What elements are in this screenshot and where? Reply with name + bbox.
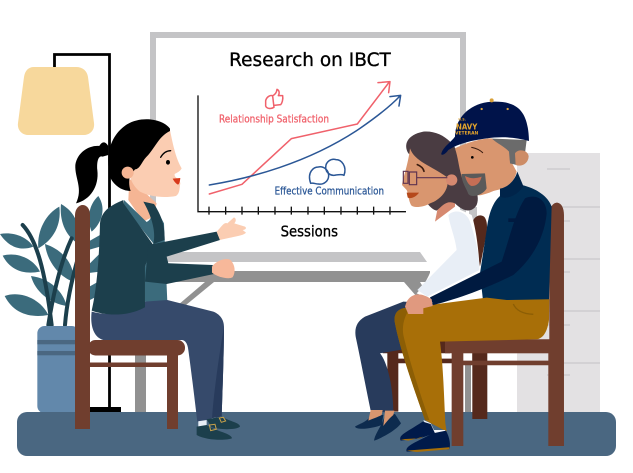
label: effective communication: Effective Communication: [275, 185, 384, 197]
teal blouse: [124, 200, 167, 302]
jacket: [92, 200, 153, 315]
therapist: [75, 119, 246, 440]
chart axes: [198, 95, 406, 215]
woman brow and mouth: [417, 165, 424, 171]
eye and brow: [161, 151, 171, 157]
client hands: [405, 294, 433, 314]
mouth: [173, 178, 180, 185]
face: [129, 130, 182, 197]
man neck: [467, 153, 517, 193]
woman white shirt: [417, 207, 479, 300]
man sweater: [480, 185, 552, 303]
line: effective communication: [209, 95, 401, 185]
woman shoes: [355, 414, 383, 429]
plant vase: [37, 326, 79, 413]
shoe buckles: [209, 417, 226, 431]
man beard: [462, 173, 487, 196]
man ear: [515, 150, 529, 166]
socks: [198, 417, 222, 427]
man socks: [423, 420, 445, 434]
navy veteran cap: VETERAN: [455, 131, 479, 137]
woman ear: [446, 174, 457, 186]
label: relationship satisfaction: Relationship Satisfaction: [219, 114, 329, 126]
man mouth: [465, 176, 482, 186]
navy veteran cap: [441, 98, 529, 155]
trouser shadow: [395, 308, 429, 420]
man shoes: [400, 422, 435, 441]
couple: [355, 98, 552, 452]
chart: [198, 49, 406, 241]
icon: speech bubbles: [309, 159, 345, 184]
chair: therapist: [75, 205, 185, 429]
woman neck: [435, 190, 455, 222]
line: relationship satisfaction: [209, 82, 390, 194]
floor lamp: [18, 54, 121, 413]
icon: thumbs up: [266, 89, 283, 108]
ear: [122, 167, 134, 179]
shoes: [207, 417, 240, 429]
upper hand: [217, 217, 246, 240]
man trousers: [395, 298, 549, 432]
hair: [108, 119, 170, 191]
woman sleeve: [417, 212, 479, 297]
back chair: [383, 215, 487, 419]
man face: [455, 138, 515, 195]
woman glasses: [403, 171, 447, 185]
man hair: [487, 138, 527, 165]
lower hand: [212, 259, 235, 278]
axis label: sessions: Sessions: [281, 224, 338, 241]
cabinet: [517, 153, 600, 412]
potted plant: [0, 196, 103, 413]
neck: [128, 177, 157, 222]
table: [135, 207, 477, 412]
front chair: [445, 203, 564, 446]
cap text: U.S.: [458, 118, 466, 122]
man sleeve: [508, 218, 516, 222]
woman trousers: [355, 302, 440, 413]
whiteboard: [150, 32, 466, 262]
man collar: [500, 172, 523, 198]
woman feet: [368, 410, 394, 426]
woman hair: [406, 132, 478, 211]
client chairs: [383, 203, 564, 446]
man eye and brow: [471, 156, 474, 159]
trousers: [91, 300, 224, 422]
ponytail: [75, 142, 108, 203]
chart title: Research on IBCT: [229, 49, 391, 71]
woman face: [402, 148, 448, 207]
floor: [17, 412, 616, 456]
navy veteran cap: NAVY: [456, 122, 478, 131]
